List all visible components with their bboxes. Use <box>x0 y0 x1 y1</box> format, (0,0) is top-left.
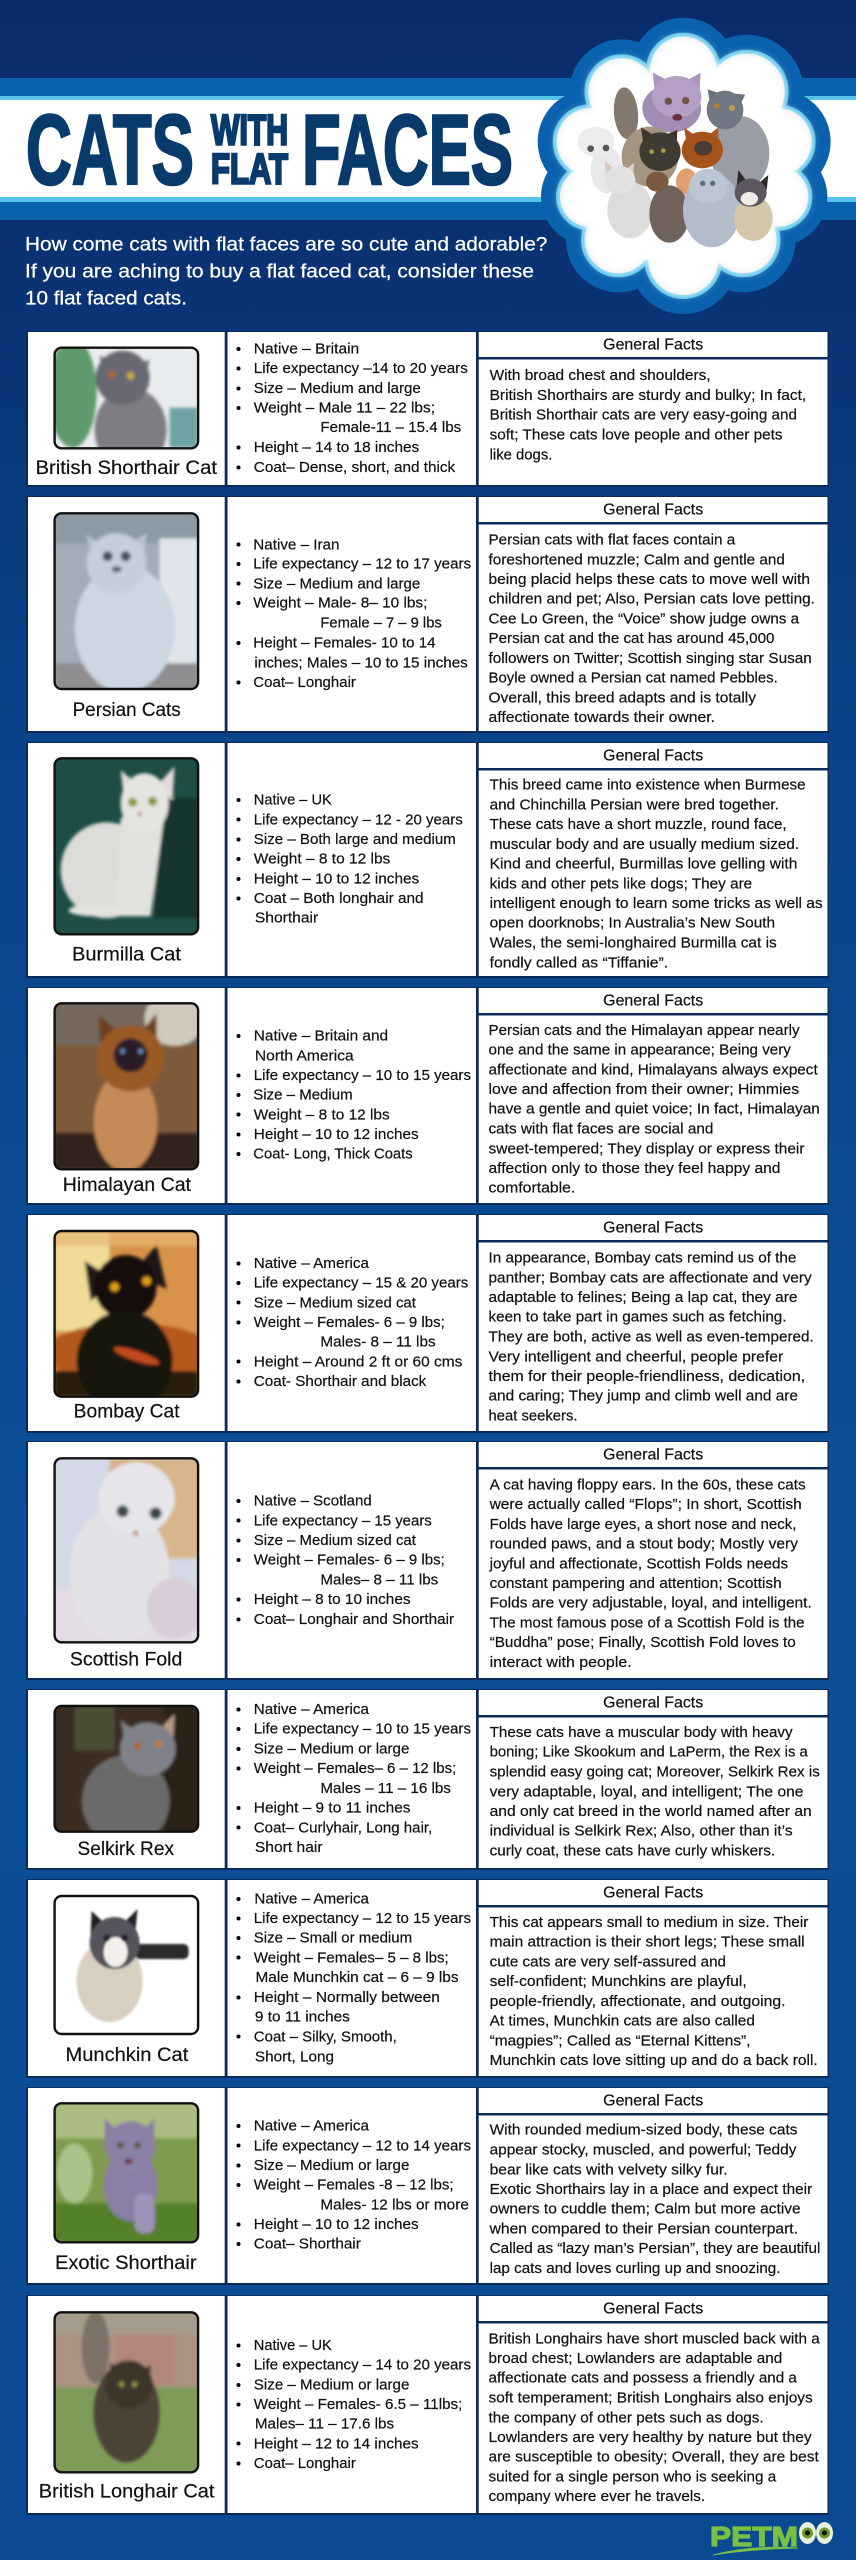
general facts text: lap cats and loves curling up and snoozing. <box>490 2261 780 2277</box>
general facts text: rounded paws, and a stout body; Mostly very <box>490 1537 799 1553</box>
general facts text: “Buddha” pose; Finally, Scottish Fold loves to <box>490 1635 796 1651</box>
breed stats list: Native – America <box>254 2119 370 2135</box>
general facts heading: General Facts <box>603 336 703 354</box>
general facts heading: General Facts <box>603 2300 703 2318</box>
breed stats list: Weight – Male- 8– 10 lbs; <box>253 596 427 612</box>
general facts text: Kind and cheerful, Burmillas love gelling with <box>490 857 797 873</box>
general facts text: Exotic Shorthairs lay in a place and expect their <box>490 2182 812 2198</box>
general facts text <box>489 1477 812 1671</box>
scalloped badge with group of cats <box>557 37 812 295</box>
illustration: group of ten cats <box>578 73 773 247</box>
intro text: How come cats with flat faces are so cute and adorable? <box>25 235 547 256</box>
general facts heading: General Facts <box>603 2092 703 2110</box>
breed stats list: Life expectancy – 12 to 17 years <box>253 557 471 573</box>
breed stats list: Coat– Longhair <box>253 675 356 691</box>
breed stats list: Weight – Male 11 – 22 lbs; <box>254 400 435 416</box>
panel: Munchkin Cat <box>26 1879 829 2078</box>
general facts heading: General Facts <box>603 992 703 1010</box>
general facts text: The most famous pose of a Scottish Fold is the <box>490 1615 805 1631</box>
breed stats list: Size – Medium sized cat <box>254 1533 416 1549</box>
breed stats list: Males- 12 lbs or more <box>320 2197 469 2213</box>
breed stats list <box>236 1029 471 1163</box>
cat name: British Shorthair Cat <box>36 458 218 479</box>
breed stats list: Life expectancy – 10 to 15 years <box>254 1722 471 1738</box>
cat name: Scottish Fold <box>70 1650 182 1671</box>
breed stats list: Native – Scotland <box>254 1494 372 1510</box>
general facts heading: General Facts <box>603 1220 703 1236</box>
breed stats list: Weight – Females -8 – 12 lbs; <box>254 2178 454 2194</box>
general facts text: Very intelligent and cheerful, people prefer <box>488 1349 783 1365</box>
breed stats list: Coat – Both longhair and <box>254 891 424 907</box>
intro text: If you are aching to buy a flat faced cat, consider these <box>25 262 534 282</box>
breed stats list: Size – Medium <box>253 1088 353 1104</box>
logo: PETMOO: PETM <box>710 2521 798 2552</box>
general facts text: foreshortened muzzle; Calm and gentle and <box>488 552 785 568</box>
breed stats list: Weight – Females– 5 – 8 lbs; <box>254 1950 449 1966</box>
panel: Exotic Shorthair <box>26 2087 829 2285</box>
breed stats list: Height – 8 to 10 inches <box>254 1592 410 1608</box>
general facts text: being placid helps these cats to move well with <box>488 572 810 588</box>
breed stats list: Coat– Curlyhair, Long hair, <box>254 1820 432 1836</box>
general facts text: sweet-tempered; They display or express their <box>488 1141 805 1157</box>
general facts text: and caring; They jump and climb well and are <box>488 1389 798 1405</box>
general facts text: In appearance, Bombay cats remind us of the <box>488 1251 796 1267</box>
general facts text: love and affection from their owner; Himmies <box>488 1082 799 1098</box>
logo: PETMOO <box>710 2521 833 2555</box>
general facts text: Persian cats with flat faces contain a <box>488 533 736 549</box>
photo: Burmilla <box>55 758 199 934</box>
breed stats list: Size – Medium or large <box>254 2378 409 2394</box>
photo: British Longhair <box>55 2311 198 2472</box>
general facts heading: General Facts <box>603 502 703 518</box>
photo: Bombay <box>53 1230 200 1398</box>
breed stats list: Native – Britain and <box>254 1029 388 1045</box>
breed stats list: Native – UK <box>254 2338 332 2354</box>
general facts text: heat seekers. <box>488 1408 578 1424</box>
panel: Scottish Fold <box>26 1441 829 1680</box>
breed stats list: 9 to 11 inches <box>255 2010 350 2026</box>
general facts text <box>490 1725 820 1859</box>
breed stats list: Coat – Silky, Smooth, <box>254 2029 397 2045</box>
general facts text: Cee Lo Green, the “Voice” show judge owns a <box>488 612 800 628</box>
general facts text: These cats have a muscular body with heavy <box>490 1725 793 1741</box>
photo: Himalayan <box>55 990 205 1171</box>
photo: Scottish Fold <box>55 1458 203 1642</box>
intro text <box>25 235 547 310</box>
general facts text: owners to cuddle them; Calm but more active <box>490 2202 801 2218</box>
breed stats list: Size – Medium or large <box>254 1742 409 1758</box>
breed stats list: Native – America <box>254 1256 370 1272</box>
general facts text: broad chest; Lowlanders are adaptable and <box>488 2351 782 2367</box>
breed stats list: Weight – 8 to 12 lbs <box>254 852 390 868</box>
title: Cats With Flat Faces: FACES <box>302 94 513 205</box>
breed stats list: Weight – 8 to 12 lbs <box>254 1107 390 1123</box>
general facts heading: General Facts <box>603 1446 703 1464</box>
cat name: Himalayan Cat <box>63 1175 192 1196</box>
general facts text <box>488 2331 821 2505</box>
breed stats list: Height – 14 to 18 inches <box>254 440 419 456</box>
breed stats list: Height – 12 to 14 inches <box>254 2436 419 2452</box>
panel: Selkirk Rex <box>26 1689 829 1870</box>
general facts text: Wales, the semi-longhaired Burmilla cat is <box>490 935 777 951</box>
panel: Himalayan Cat <box>26 987 829 1205</box>
general facts text <box>490 778 823 971</box>
general facts text: Persian cats and the Himalayan appear nearly <box>488 1023 800 1039</box>
general facts text: them for their people-friendliness, dedication, <box>488 1369 805 1385</box>
breed stats list: Life expectancy – 12 to 14 years <box>254 2138 471 2154</box>
cat name: Selkirk Rex <box>78 1839 175 1860</box>
general facts text: cats with flat faces are social and <box>488 1122 713 1138</box>
breed stats list: Height – 9 to 11 inches <box>254 1801 410 1817</box>
breed stats list: Native – Britain <box>254 342 359 358</box>
general facts text: soft temperament; British Longhairs also enjoys <box>488 2390 813 2406</box>
breed stats list: Weight – Females– 6 – 12 lbs; <box>254 1761 456 1777</box>
breed stats list: Size – Medium sized cat <box>254 1295 416 1311</box>
general facts text: This cat appears small to medium in size. Their <box>490 1915 808 1931</box>
cat name: Munchkin Cat <box>66 2045 189 2066</box>
general facts text: This breed came into existence when Burmese <box>490 778 806 794</box>
breed stats list: Males- 8 – 11 lbs <box>320 1335 436 1351</box>
breed stats list <box>236 537 471 691</box>
breed stats list: Life expectancy – 10 to 15 years <box>254 1068 471 1084</box>
breed stats list: Height – 10 to 12 inches <box>254 872 419 888</box>
general facts text: keen to take part in games such as fetching. <box>488 1310 786 1326</box>
photo: Persian <box>55 513 198 692</box>
general facts text: the company of other pets such as dogs. <box>488 2410 764 2426</box>
general facts text: kids and other pets like dogs; They are <box>490 876 752 892</box>
breed stats list <box>236 2338 471 2472</box>
general facts text: were actually called “Flops”; In short, Scottish <box>489 1497 802 1513</box>
general facts text: are susceptible to obesity; Overall, they are best <box>488 2450 819 2466</box>
general facts text: British Shorthair cats are very easy-going and <box>490 408 797 424</box>
general facts text <box>490 368 806 463</box>
general facts text: very adaptable, loyal, and intelligent; The one <box>490 1784 804 1800</box>
breed stats list: Height – 10 to 12 inches <box>254 2217 419 2233</box>
general facts text: affection only to those they feel happy and <box>488 1161 780 1177</box>
general facts text: Munchkin cats love sitting up and do a back roll. <box>490 2053 818 2069</box>
breed stats list: Coat– Longhair <box>254 2456 356 2472</box>
breed stats list: Native – Iran <box>253 537 340 553</box>
breed stats list: Short, Long <box>255 2049 334 2065</box>
general facts text: when compared to their Persian counterpart. <box>489 2221 798 2237</box>
general facts text: Overall, this breed adapts and is totally <box>488 691 757 707</box>
general facts text: With rounded medium-sized body, these cats <box>490 2123 798 2139</box>
general facts text: boning; Like Skookum and LaPerm, the Rex is a <box>490 1745 809 1761</box>
breed stats list: Size – Small or medium <box>254 1931 412 1947</box>
panel: Persian Cats <box>26 496 829 733</box>
breed stats list: Life expectancy – 12 - 20 years <box>254 812 463 828</box>
general facts text: panther; Bombay cats are affectionate and very <box>488 1270 812 1286</box>
general facts text: “magpies”; Called as “Eternal Kittens”, <box>490 2033 750 2049</box>
title: Cats With Flat Faces: WITH <box>211 106 288 154</box>
general facts text: Folds have large eyes, a short nose and neck, <box>490 1517 796 1533</box>
breed stats list: Males – 11 – 16 lbs <box>320 1781 451 1797</box>
general facts text: curly coat, these cats have curly whiskers. <box>490 1843 775 1859</box>
photo: Selkirk Rex <box>55 1706 199 1847</box>
breed stats list <box>236 2119 471 2253</box>
general facts text: Persian cat and the cat has around 45,000 <box>488 631 774 647</box>
general facts text: main attraction is their short legs; These small <box>490 1935 805 1951</box>
breed stats list <box>236 1494 454 1628</box>
breed stats list <box>236 793 463 927</box>
general facts text: intelligent enough to learn some tricks as well as <box>490 896 823 912</box>
general facts text: interact with people. <box>490 1655 632 1671</box>
panel: Bombay Cat <box>26 1214 829 1433</box>
general facts text: self-confident; Munchkins are playful, <box>490 1974 747 1990</box>
general facts text <box>490 1915 818 2069</box>
breed stats list: Weight – Females- 6 – 9 lbs; <box>254 1553 445 1569</box>
title: Cats With Flat Faces <box>26 94 513 205</box>
breed stats list: Size – Medium and large <box>253 576 420 592</box>
title banner band <box>0 78 856 220</box>
breed stats list <box>236 1891 471 2065</box>
breed stats list: Weight – Females- 6 – 9 lbs; <box>254 1315 445 1331</box>
general facts text: like dogs. <box>490 447 552 463</box>
photo: Exotic Shorthair <box>55 2103 198 2242</box>
cat name: Persian Cats <box>73 700 181 721</box>
breed stats list: Coat– Dense, short, and thick <box>254 460 456 476</box>
general facts text: splendid easy going cat; Moreover, Selkirk Rex is <box>490 1764 820 1780</box>
breed stats list: Coat– Longhair and Shorthair <box>254 1612 454 1628</box>
general facts text: Folds are very adjustable, loyal, and intelligent. <box>490 1596 812 1612</box>
general facts text: appear stocky, muscled, and powerful; Teddy <box>490 2143 797 2159</box>
general facts text: muscular body and are usually medium sized. <box>490 837 799 853</box>
breed stats list <box>236 342 468 476</box>
cat name: Exotic Shorthair <box>55 2253 197 2274</box>
general facts text: soft; These cats love people and other pets <box>490 428 783 444</box>
title: Cats With Flat Faces: CATS <box>26 94 194 205</box>
general facts heading: General Facts <box>603 1884 703 1902</box>
general facts text: With broad chest and shoulders, <box>490 368 711 384</box>
breed stats list: Height – Normally between <box>254 1990 440 2006</box>
breed stats list: Weight – Females- 6.5 – 11lbs; <box>254 2397 462 2413</box>
breed stats list: Native – America <box>254 1891 370 1907</box>
breed stats list: Coat– Shorthair <box>254 2237 361 2253</box>
general facts text: followers on Twitter; Scottish singing star Susan <box>488 651 812 667</box>
title: Cats With Flat Faces: FLAT <box>211 146 288 194</box>
breed stats list: Size – Both large and medium <box>254 832 456 848</box>
general facts text: company where ever he travels. <box>488 2489 705 2505</box>
panel: British Longhair Cat <box>26 2295 829 2515</box>
general facts text: Boyle owned a Persian cat named Pebbles. <box>488 671 778 687</box>
general facts text <box>488 1023 820 1197</box>
panel: Burmilla Cat <box>26 742 829 978</box>
general facts text: comfortable. <box>488 1181 575 1197</box>
general facts text: fondly called as “Tiffanie”. <box>490 955 668 971</box>
general facts text: affectionate towards their owner. <box>488 710 715 726</box>
general facts text: Called as “lazy man’s Persian”, they are beautiful <box>490 2241 820 2257</box>
general facts text: cute cats are very self-assured and <box>490 1954 726 1970</box>
general facts text: joyful and affectionate, Scottish Folds needs <box>489 1556 788 1572</box>
breed stats list: Life expectancy – 15 & 20 years <box>254 1276 468 1292</box>
breed stats list: Life expectancy – 14 to 20 years <box>254 2358 471 2374</box>
general facts text: individual is Selkirk Rex; Also, other than it’s <box>490 1824 793 1840</box>
general facts text: constant pampering and attention; Scottish <box>490 1576 782 1592</box>
general facts text: adaptable to felines; Being a lap cat, they are <box>488 1290 798 1306</box>
breed stats list: Height – Around 2 ft or 60 cms <box>254 1354 462 1370</box>
breed stats list: North America <box>255 1048 355 1064</box>
breed stats list: inches; Males – 10 to 15 inches <box>254 655 468 671</box>
general facts text: suited for a single person who is seeking a <box>488 2469 777 2485</box>
general facts text: British Longhairs have short muscled back with a <box>488 2331 821 2347</box>
general facts heading: General Facts <box>603 748 703 764</box>
breed stats list: Life expectancy – 12 to 15 years <box>254 1911 471 1927</box>
breed stats list: Height – 10 to 12 inches <box>254 1127 419 1143</box>
general facts text: affectionate and kind, Himalayans always expect <box>488 1062 818 1078</box>
general facts text: A cat having floppy ears. In the 60s, these cats <box>490 1477 806 1493</box>
general facts text: and Chinchilla Persian were bred together. <box>490 797 779 813</box>
cat name: Bombay Cat <box>74 1402 180 1423</box>
general facts text: At times, Munchkin cats are also called <box>490 2014 755 2030</box>
general facts text: have a gentle and quiet voice; In fact, Himalayan <box>488 1102 820 1118</box>
general facts text: children and pet; Also, Persian cats love petting. <box>488 592 815 608</box>
breed stats list: Coat- Long, Thick Coats <box>253 1147 413 1163</box>
breed stats list: Size – Medium and large <box>254 381 421 397</box>
general facts text <box>489 2123 820 2277</box>
general facts text: They are both, active as well as even-tempered. <box>488 1330 814 1346</box>
general facts heading: General Facts <box>603 1694 703 1712</box>
photo: Munchkin <box>55 1896 198 2034</box>
breed stats list: Height – Females- 10 to 14 <box>253 636 436 652</box>
breed stats list: Coat- Shorthair and black <box>254 1374 427 1390</box>
breed stats list <box>236 1256 468 1390</box>
breed stats list: Life expectancy –14 to 20 years <box>254 361 468 377</box>
breed stats list: Native – UK <box>254 793 332 809</box>
breed stats list: Males– 8 – 11 lbs <box>320 1572 438 1588</box>
breed stats list: Size – Medium or large <box>254 2158 409 2174</box>
panel: British Shorthair Cat <box>26 331 829 487</box>
breed stats list: Native – America <box>254 1702 370 1718</box>
general facts text: and only cat breed in the world named after an <box>490 1804 812 1820</box>
cat name: Burmilla Cat <box>72 945 182 966</box>
general facts text <box>488 533 815 726</box>
breed stats list: Males– 11 – 17.6 lbs <box>255 2417 394 2433</box>
breed stats list: Female-11 – 15.4 lbs <box>320 420 461 436</box>
general facts text: Lowlanders are very healthy by nature but they <box>488 2430 812 2446</box>
general facts text: bear like cats with velvety silky fur. <box>490 2162 728 2178</box>
general facts text: one and the same in appearance; Being very <box>488 1043 792 1059</box>
intro text: 10 flat faced cats. <box>25 289 187 310</box>
general facts text: British Shorthairs are sturdy and bulky; In fact, <box>490 388 806 404</box>
breed stats list: Male Munchkin cat – 6 – 9 lbs <box>256 1970 458 1986</box>
general facts text: These cats have a short muzzle, round face, <box>490 817 787 833</box>
general facts text: people-friendly, affectionate, and outgoing. <box>490 1994 786 2010</box>
photo: British Shorthair <box>53 346 200 450</box>
general facts text <box>488 1251 814 1424</box>
breed stats list: Female – 7 – 9 lbs <box>320 616 442 632</box>
breed stats list: Life expectancy – 15 years <box>254 1513 432 1529</box>
breed stats list <box>236 1702 471 1856</box>
general facts text: affectionate cats and possess a friendly and a <box>488 2371 798 2387</box>
cat name: British Longhair Cat <box>39 2482 215 2503</box>
breed stats list: Short hair <box>255 1840 323 1856</box>
general facts text: open doorknobs; In Australia’s New South <box>490 916 775 932</box>
breed stats list: Shorthair <box>255 911 318 927</box>
